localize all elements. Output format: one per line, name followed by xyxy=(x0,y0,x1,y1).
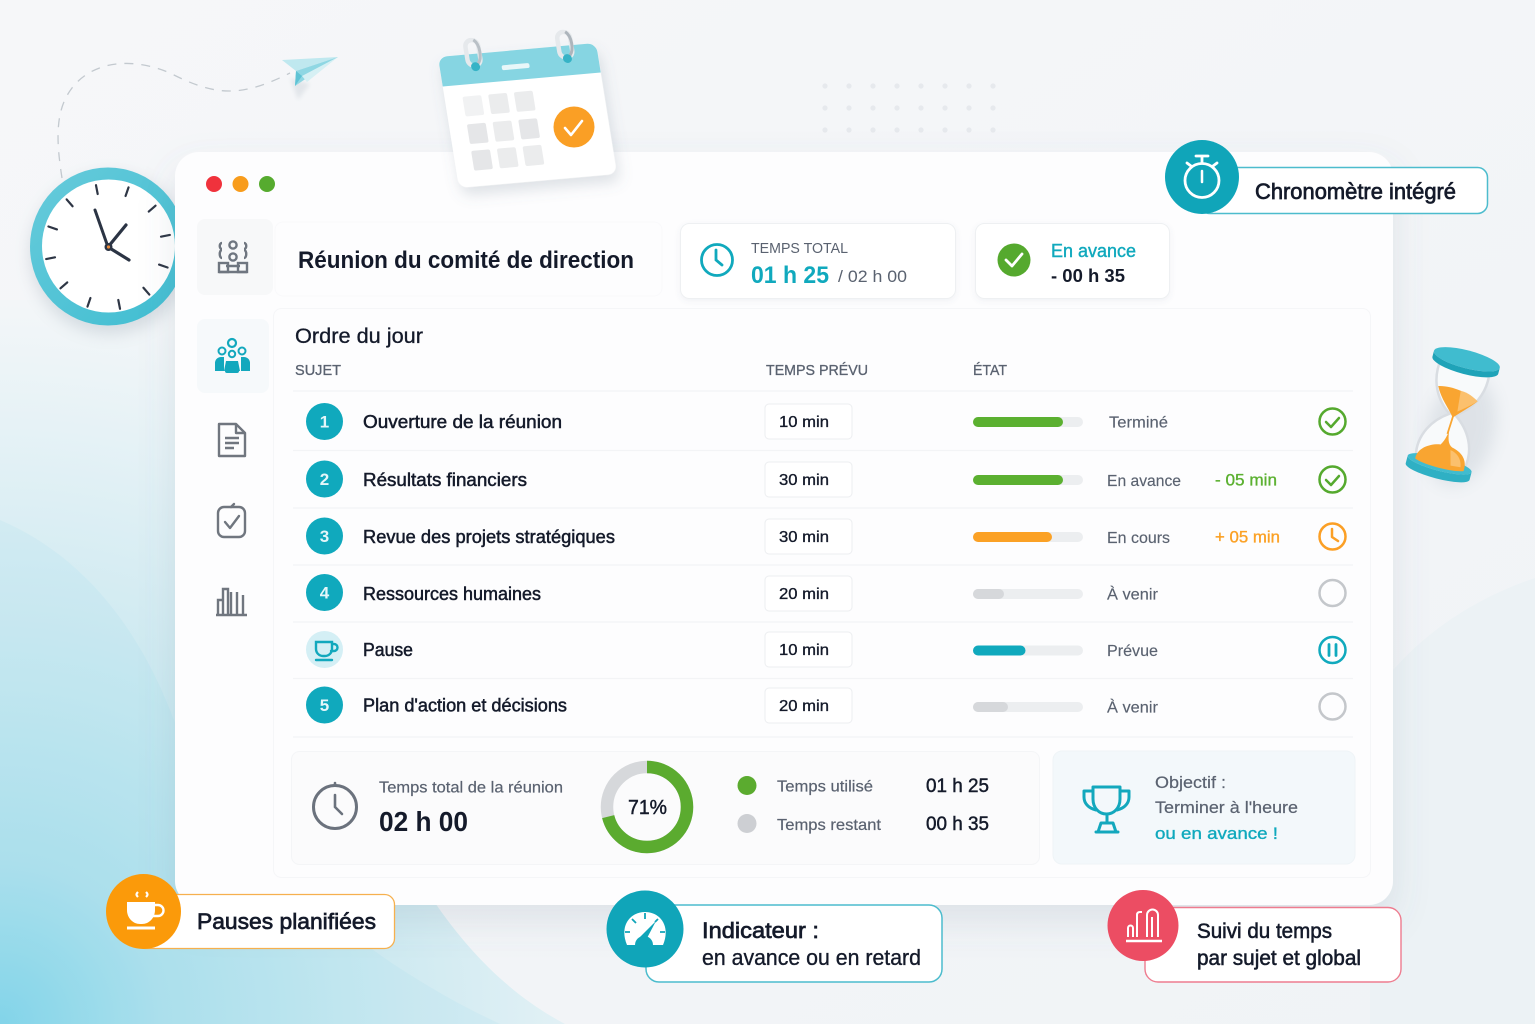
panel: objective: Objectif : xyxy=(1155,773,1226,792)
row 6: 5 xyxy=(320,696,329,715)
callout: planned breaks: Pauses planifiées xyxy=(197,909,376,934)
legend: Temps restant xyxy=(777,817,882,834)
row 1: 10 min xyxy=(779,414,829,431)
card: ahead indicator: - 00 h 35 xyxy=(1051,266,1125,286)
icon: document xyxy=(219,424,245,456)
panel: objective xyxy=(1053,751,1355,864)
row 2: - 05 min xyxy=(1215,472,1277,490)
row 5: break: Prévue xyxy=(1107,643,1158,660)
row 4: À venir xyxy=(1107,584,1159,604)
icon: bar chart xyxy=(1126,910,1162,941)
legend xyxy=(738,776,989,835)
callout: stopwatch xyxy=(1165,140,1488,214)
callout: indicator: en avance ou en retard xyxy=(702,945,921,970)
legend: 00 h 35 xyxy=(926,814,989,835)
callout: time tracking: par sujet et global xyxy=(1197,947,1361,970)
icon: stopwatch xyxy=(314,783,356,828)
legend: Temps utilisé xyxy=(777,778,873,796)
donut chart: 71%: 71% xyxy=(628,797,667,819)
main dashboard card xyxy=(175,152,1393,905)
icon: green check xyxy=(998,244,1030,276)
row 3 xyxy=(306,518,1346,554)
row 6: Plan d'action et décisions xyxy=(363,696,567,716)
icon: gauge xyxy=(624,912,666,954)
row 6: 20 min xyxy=(779,698,829,715)
panel: objective: Terminer à l'heure xyxy=(1155,798,1298,817)
card: total time: TEMPS TOTAL xyxy=(751,241,848,257)
panel: agenda xyxy=(274,308,1370,878)
icon: stopwatch xyxy=(1185,156,1219,198)
row 4: Ressources humaines xyxy=(363,584,541,604)
callout: indicator: Indicateur : xyxy=(702,918,819,943)
row 3: 30 min xyxy=(779,529,829,546)
heading: agenda: Ordre du jour xyxy=(295,325,423,348)
row 4: 20 min xyxy=(779,586,829,603)
icon: bar chart xyxy=(216,589,247,615)
row 1: Terminé xyxy=(1109,414,1168,432)
donut chart: 71% xyxy=(607,767,687,847)
icon: checklist xyxy=(218,504,245,537)
column headers: ÉTAT xyxy=(973,362,1007,379)
panel: objective: ou en avance ! xyxy=(1155,824,1278,843)
row 5: break xyxy=(306,631,1346,668)
icon: trophy xyxy=(1084,787,1129,832)
row 1: 1 xyxy=(320,412,329,432)
row 2: Résultats financiers xyxy=(363,470,527,490)
header logo tile xyxy=(197,219,273,295)
row 2: 30 min xyxy=(779,472,829,489)
icon: coffee cup xyxy=(127,892,164,930)
callout: stopwatch: Chronomètre intégré xyxy=(1255,179,1456,204)
illustration: hourglass xyxy=(1402,342,1514,494)
panel: total meeting time: Temps total de la réunion xyxy=(379,780,563,796)
icon: team xyxy=(215,339,250,373)
row 4 xyxy=(306,574,1346,611)
row 1 xyxy=(306,403,1346,440)
card: total time: 01 h 25 xyxy=(751,262,829,289)
panel: total meeting time xyxy=(292,752,1040,864)
illustration: calendar xyxy=(436,29,617,188)
window controls xyxy=(206,176,275,192)
column headers: TEMPS PRÉVU xyxy=(766,362,868,379)
icon: cup xyxy=(316,642,338,660)
title panel xyxy=(275,222,662,296)
callout: time tracking xyxy=(1108,890,1401,982)
row 3: En cours xyxy=(1107,530,1170,547)
legend: 01 h 25 xyxy=(926,776,989,797)
sidebar navigation xyxy=(197,319,269,615)
icon: calendar check badge xyxy=(554,106,594,148)
row 5: break: Pause xyxy=(363,640,413,660)
panel: total meeting time: 02 h 00 xyxy=(379,806,468,837)
card: total time: / 02 h 00 xyxy=(838,267,907,286)
row 2 xyxy=(306,460,1346,498)
callout: time tracking: Suivi du temps xyxy=(1197,920,1332,943)
illustration: wall clock xyxy=(30,168,190,334)
title panel: Réunion du comité de direction xyxy=(298,247,634,274)
card: ahead indicator: En avance xyxy=(1051,241,1136,261)
column headers xyxy=(295,362,1007,379)
row 1: Ouverture de la réunion xyxy=(363,412,562,432)
card: ahead indicator xyxy=(976,224,1170,298)
row 6: À venir xyxy=(1107,698,1159,716)
row 3: + 05 min xyxy=(1215,528,1280,546)
callout: planned breaks xyxy=(106,874,394,949)
row 6 xyxy=(306,686,1346,724)
row 5: break: 10 min xyxy=(779,642,829,659)
icon: paper plane xyxy=(282,57,338,100)
row 4: 4 xyxy=(320,584,330,602)
column headers: SUJET xyxy=(295,363,341,379)
row 2: 2 xyxy=(320,470,329,489)
icon: clock xyxy=(702,244,732,276)
card: total time xyxy=(680,224,956,298)
row 2: En avance xyxy=(1107,473,1181,490)
callout: indicator xyxy=(606,890,942,982)
row 3: 3 xyxy=(320,527,329,546)
row 3: Revue des projets stratégiques xyxy=(363,527,615,547)
dashed flight path xyxy=(58,63,290,178)
